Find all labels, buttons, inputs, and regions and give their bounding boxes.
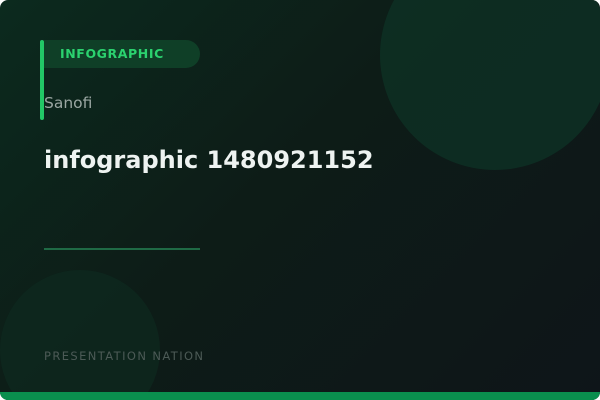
decorative circle top right [380,0,600,170]
footer text: PRESENTATION NATION [44,349,204,363]
divider line [44,248,200,250]
decorative circle bottom left [0,270,160,400]
bottom accent bar [0,392,600,400]
subtitle: Sanofi: Sanofi [44,94,92,112]
accent bar [40,40,44,120]
title: infographic 1480921152 [44,146,374,174]
tag pill: INFOGRAPHIC [60,46,164,61]
tag pill [44,40,200,68]
